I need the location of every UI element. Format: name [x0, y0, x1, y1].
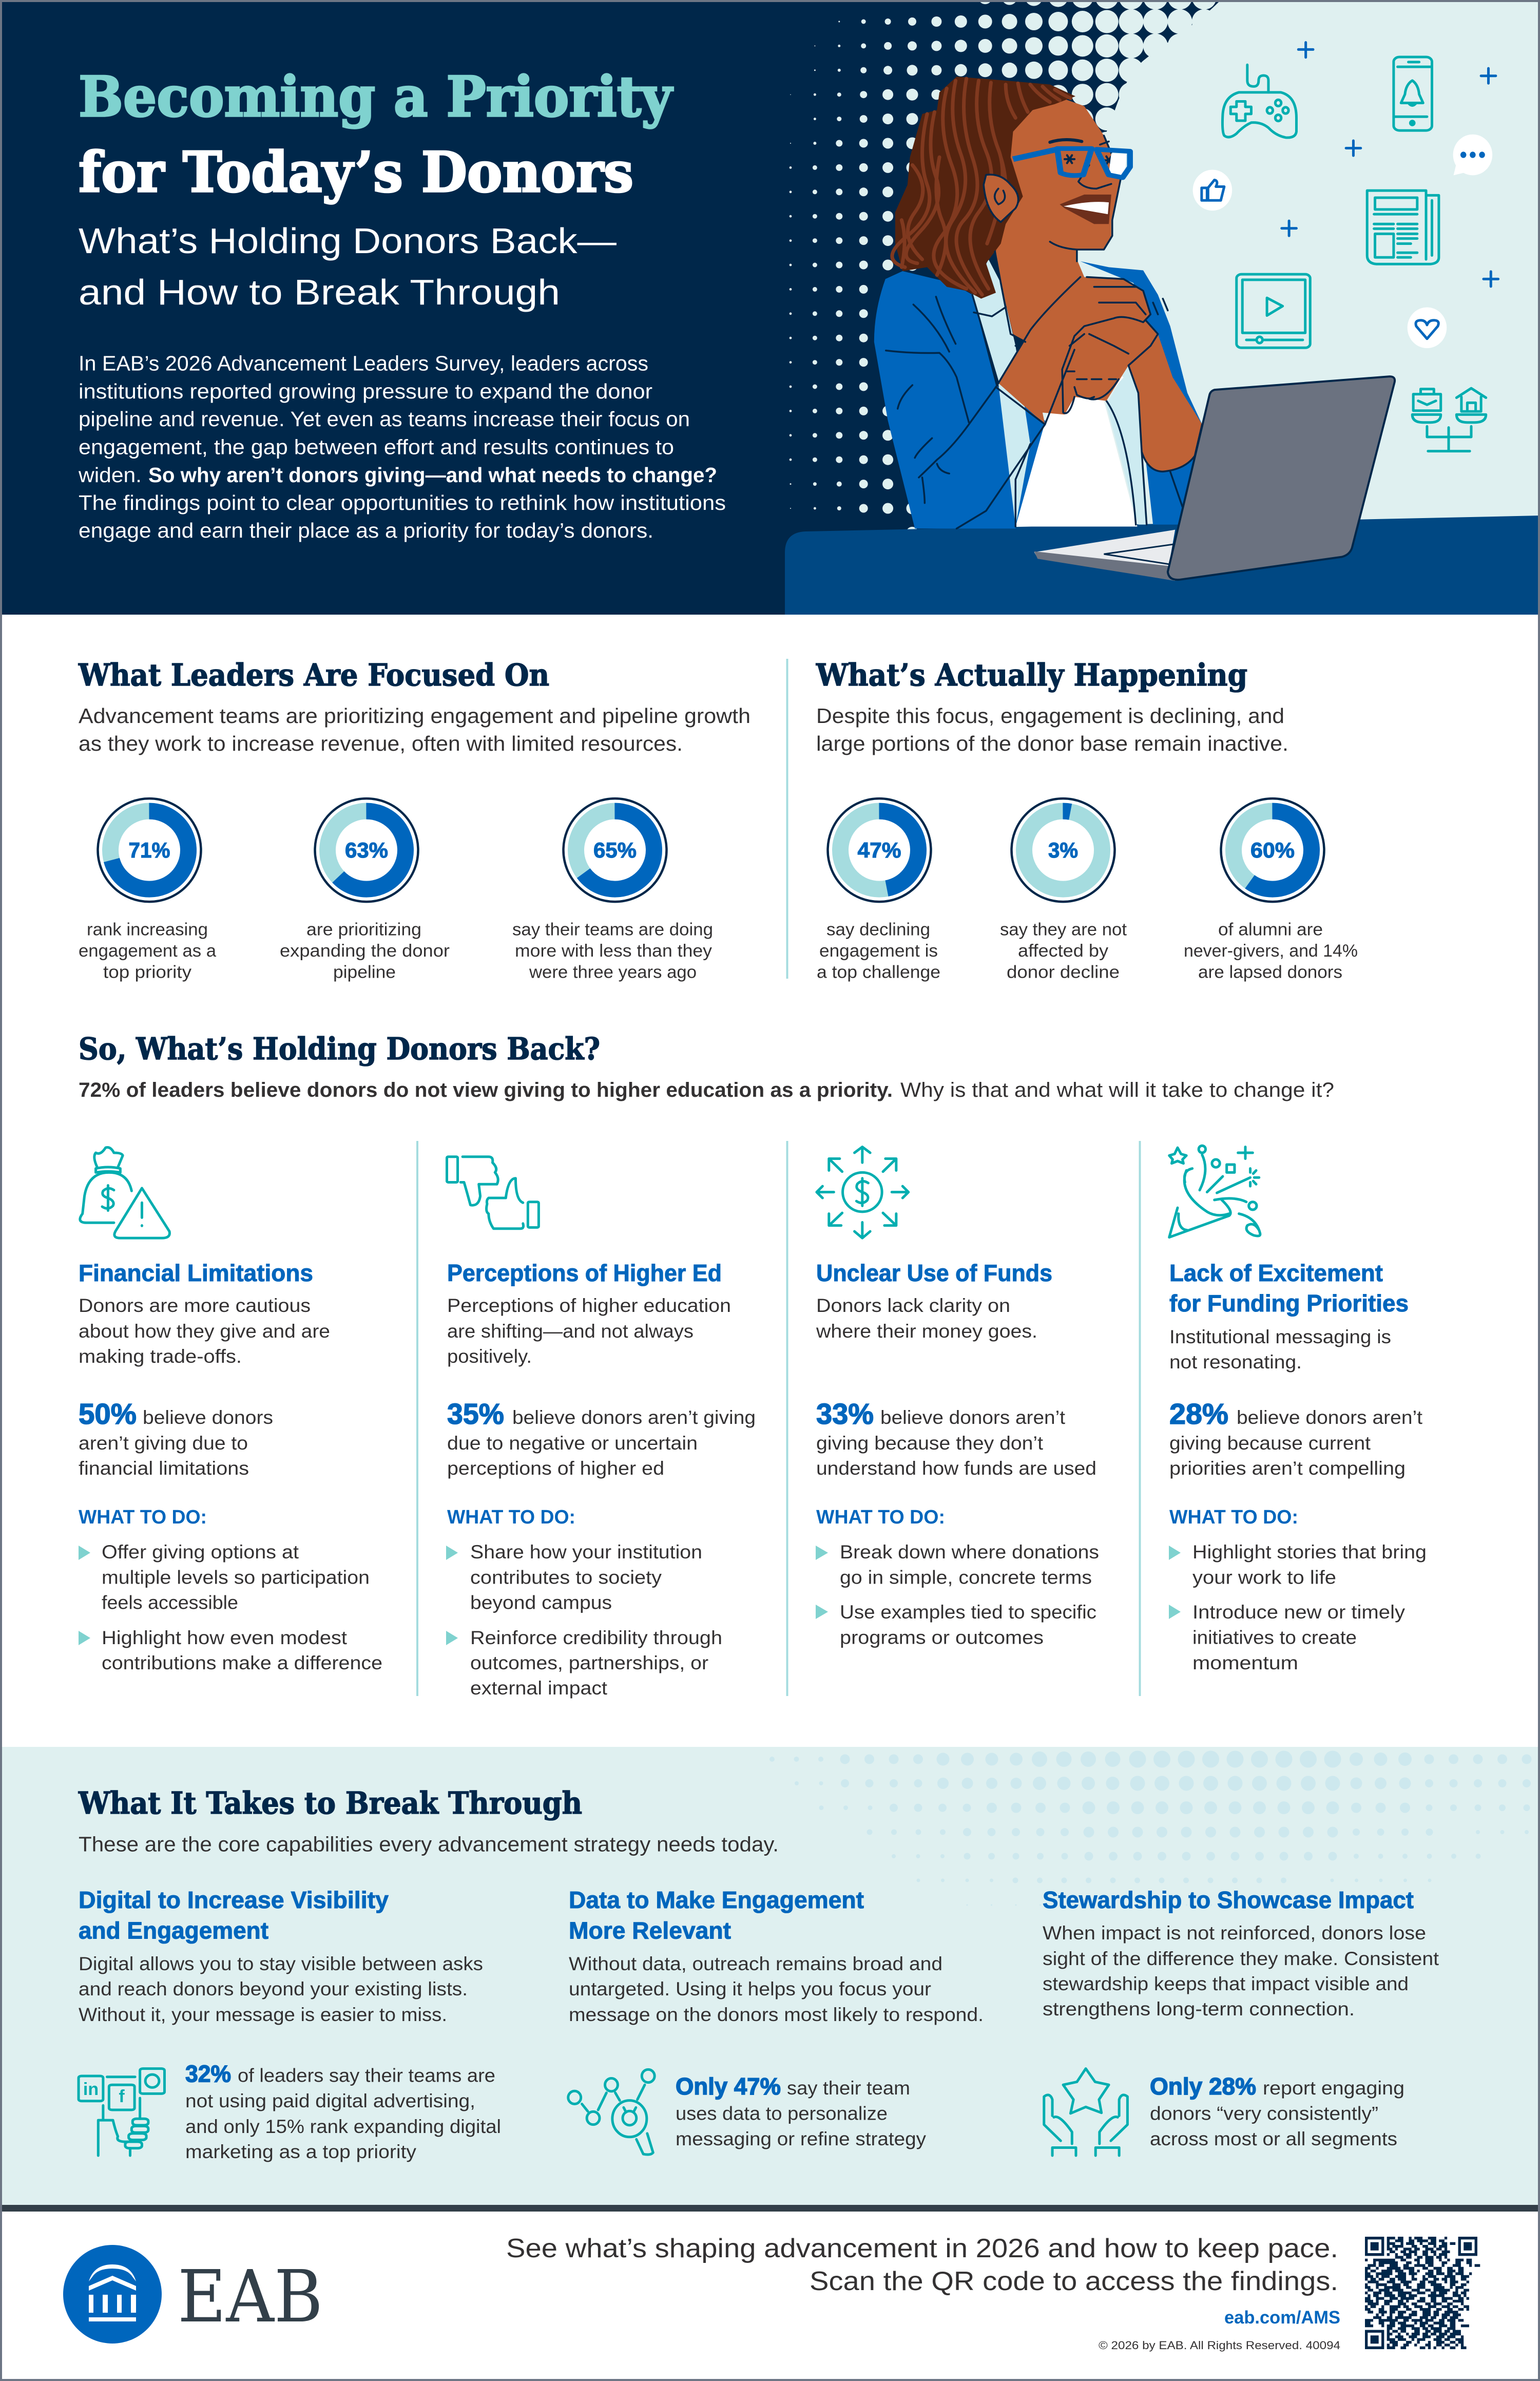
statistic — [1150, 2073, 1404, 2149]
description — [816, 1295, 1037, 1342]
statistic: priorities aren’t compelling — [1169, 1458, 1406, 1479]
heading — [79, 1887, 389, 1944]
action list — [446, 1541, 722, 1699]
description: Donors are more cautious — [79, 1295, 311, 1316]
what to do label: WHAT TO DO: — [79, 1507, 207, 1528]
icon: thumbs up badge — [1193, 170, 1232, 211]
caption: 65% — [512, 920, 713, 982]
description: where their money goes. — [816, 1321, 1037, 1342]
donut chart: 60% — [1221, 798, 1324, 902]
action list: programs or outcomes — [840, 1627, 1044, 1648]
caption: 65%: say their teams are doing — [512, 920, 713, 939]
caption: 60% — [1184, 920, 1358, 982]
donut chart: 47% — [827, 798, 931, 902]
action list: momentum — [1192, 1652, 1298, 1673]
title: for Today’s Donors — [79, 140, 633, 205]
heading: Financial Limitations — [79, 1260, 313, 1286]
link: eab.com/AMS — [1224, 2308, 1340, 2328]
description: positively. — [447, 1346, 532, 1367]
icon: video player — [1237, 274, 1310, 348]
donut chart: 63%: 63% — [345, 838, 388, 862]
call to action — [506, 2234, 1338, 2296]
action list: Offer giving options at — [102, 1541, 299, 1563]
statistic — [185, 2060, 501, 2162]
caption: 63% — [280, 920, 450, 982]
intro paragraph: pipeline and revenue. Yet even as teams increase their focus on — [79, 407, 690, 431]
intro text: large portions of the donor base remain inactive. — [816, 732, 1288, 755]
donut chart: 3%: 3% — [1048, 838, 1078, 862]
icon: thumbs down and up — [447, 1157, 538, 1229]
statistic — [79, 1398, 273, 1479]
description — [79, 1953, 483, 2025]
what to do label: WHAT TO DO: — [1169, 1507, 1298, 1528]
statistic: believe donors — [143, 1407, 273, 1428]
icon: plus signs — [1282, 43, 1498, 287]
heading: Digital to Increase Visibility — [79, 1887, 389, 1913]
lead sentence: 72% of leaders believe donors do not view giving to higher education as a priority. — [79, 1079, 893, 1101]
caption: 63%: pipeline — [333, 963, 396, 982]
description: making trade-offs. — [79, 1346, 242, 1367]
description — [569, 1953, 984, 2025]
hands — [996, 277, 1202, 471]
icon: hands holding star — [1044, 2069, 1127, 2156]
donut chart: 60%: 60% — [1250, 838, 1295, 862]
light background panel — [1001, 0, 1540, 615]
title — [79, 65, 673, 205]
donut chart: 63% — [315, 798, 418, 902]
action list — [1169, 1541, 1427, 1673]
description — [79, 1295, 330, 1367]
statistic: perceptions of higher ed — [447, 1458, 664, 1479]
heading: Stewardship to Showcase Impact — [1043, 1887, 1414, 1913]
icon: party popper — [1169, 1146, 1260, 1237]
heading: so what's holding donors back: So, What’s Holding Donors Back? — [79, 1031, 600, 1066]
icon: social media in hand: in — [83, 2080, 99, 2099]
statistic: believe donors aren’t — [880, 1407, 1066, 1428]
icon: dollar with arrows — [817, 1147, 909, 1238]
action list: Use examples tied to specific — [840, 1602, 1096, 1623]
caption: 60%: of alumni are — [1218, 920, 1323, 939]
donut chart: 71%: 71% — [128, 838, 170, 862]
footer — [63, 2234, 1480, 2352]
description: are shifting—and not always — [447, 1321, 694, 1342]
action list — [79, 1541, 382, 1673]
description: When impact is not reinforced, donors lose — [1043, 1922, 1426, 1944]
description: message on the donors most likely to respond. — [569, 2004, 984, 2025]
caption: 60%: never-givers, and 14% — [1184, 941, 1358, 961]
statistic: report engaging — [1263, 2078, 1404, 2099]
caption: 47%: a top challenge — [817, 963, 940, 982]
heading: Lack of Excitement — [1169, 1260, 1383, 1286]
caption: 63%: expanding the donor — [280, 941, 450, 961]
action list: contributes to society — [470, 1567, 662, 1588]
intro paragraph: engage and earn their place as a priority for today’s donors. — [79, 519, 653, 542]
description — [1169, 1326, 1391, 1373]
logo: EAB: EAB — [178, 2255, 323, 2339]
intro paragraph: widen. — [78, 463, 142, 487]
donut chart: 47%: 47% — [857, 838, 901, 862]
call to action: See what’s shaping advancement in 2026 and how to keep pace. — [506, 2234, 1338, 2263]
panel: lack of excitement — [1169, 1146, 1427, 1673]
icon: phone with bell — [1394, 57, 1432, 130]
heading: What Leaders Are Focused On — [78, 657, 549, 693]
panel: financial limitations — [79, 1148, 382, 1673]
face details — [984, 136, 1121, 342]
heading: More Relevant — [569, 1917, 731, 1944]
heading: What It Takes to Break Through — [78, 1785, 582, 1821]
capability: data — [568, 1887, 984, 2155]
statistic: understand how funds are used — [816, 1458, 1096, 1479]
intro paragraph: The findings point to clear opportunities to rethink how institutions — [79, 491, 726, 515]
statistic: financial limitations — [79, 1458, 249, 1479]
statistic: messaging or refine strategy — [676, 2128, 927, 2149]
action list — [816, 1541, 1099, 1648]
intro paragraph: engagement, the gap between effort and results continues to — [79, 435, 674, 459]
statistic: of leaders say their teams are — [238, 2065, 495, 2086]
action list: initiatives to create — [1192, 1627, 1357, 1648]
what to do label: WHAT TO DO: — [816, 1507, 945, 1528]
donut chart: 65% — [564, 798, 666, 902]
intro paragraph: So why aren’t donors giving—and what needs to change? — [148, 463, 717, 487]
intro text: Despite this focus, engagement is declining, and — [816, 704, 1284, 728]
action list: Highlight how even modest — [102, 1627, 348, 1648]
description: not resonating. — [1169, 1351, 1302, 1373]
action list: your work to life — [1192, 1567, 1336, 1588]
description: stewardship keeps that impact visible and — [1043, 1973, 1409, 1994]
statistic: giving because they don’t — [816, 1433, 1044, 1454]
heading: Unclear Use of Funds — [816, 1260, 1052, 1286]
statistic: 32% — [185, 2060, 231, 2087]
statistic — [676, 2073, 927, 2149]
subtitle: and How to Break Through — [79, 272, 560, 312]
heading: Perceptions of Higher Ed — [447, 1260, 722, 1286]
statistic: 28% — [1169, 1398, 1228, 1431]
icon: money bag with warning — [80, 1148, 169, 1238]
donut chart: 3% — [1011, 798, 1115, 902]
statistic: 35% — [447, 1398, 504, 1431]
icon: social media in hand: f — [119, 2087, 125, 2106]
capability: stewardship — [1043, 1887, 1439, 2156]
action list: beyond campus — [470, 1592, 612, 1613]
statistic: across most or all segments — [1150, 2128, 1397, 2149]
caption: 71%: top priority — [103, 963, 191, 982]
icon: balance scale — [1412, 388, 1486, 451]
call to action: Scan the QR code to access the findings. — [810, 2266, 1338, 2296]
icon: data nodes and magnifier — [568, 2069, 654, 2155]
donut chart: 71% — [98, 798, 201, 902]
panel: what it takes to break through — [0, 1747, 1540, 2205]
icon: newspaper — [1367, 191, 1439, 264]
action list: Highlight stories that bring — [1192, 1541, 1427, 1563]
statistic: uses data to personalize — [676, 2103, 888, 2124]
caption: 63%: are prioritizing — [306, 920, 421, 939]
laptop — [1034, 376, 1395, 581]
logo: EAB — [63, 2245, 323, 2344]
statistic: donors “very consistently” — [1150, 2103, 1378, 2124]
statistic: say their team — [787, 2078, 910, 2099]
caption: 71%: rank increasing — [87, 920, 208, 939]
lead sentence — [79, 1079, 1334, 1101]
description: Without data, outreach remains broad and — [569, 1953, 942, 1974]
copyright: © 2026 by EAB. All Rights Reserved. 40094 — [1099, 2339, 1340, 2352]
action list: outcomes, partnerships, or — [470, 1652, 708, 1673]
mouth — [1060, 195, 1111, 224]
action list: external impact — [470, 1678, 608, 1699]
caption: 47%: say declining — [826, 920, 930, 939]
description — [447, 1295, 731, 1367]
statistic — [816, 1398, 1096, 1479]
capability: digital — [79, 1887, 501, 2162]
caption: 3%: affected by — [1018, 941, 1108, 961]
what to do label: WHAT TO DO: — [447, 1507, 575, 1528]
panel: hero banner — [0, 0, 1540, 615]
intro text: These are the core capabilities every advancement strategy needs today. — [79, 1833, 779, 1856]
icon: game controller — [1222, 65, 1296, 138]
description: Digital allows you to stay visible between asks — [79, 1953, 483, 1974]
statistic: believe donors aren’t giving — [512, 1407, 756, 1428]
caption: 47%: engagement is — [819, 941, 938, 961]
halftone dots — [791, 0, 1204, 533]
desk — [785, 516, 1540, 615]
statistic: and only 15% rank expanding digital — [185, 2116, 501, 2137]
description: Perceptions of higher education — [447, 1295, 731, 1316]
statistic: not using paid digital advertising, — [185, 2090, 475, 2111]
description: sight of the difference they make. Consistent — [1043, 1948, 1439, 1969]
intro paragraph — [78, 351, 726, 542]
action list: Reinforce credibility through — [470, 1627, 722, 1648]
action list: multiple levels so participation — [102, 1567, 370, 1588]
statistic — [1169, 1398, 1423, 1479]
action list: go in simple, concrete terms — [840, 1567, 1092, 1588]
panel: what's actually happening — [816, 657, 1358, 982]
description: about how they give and are — [79, 1321, 330, 1342]
description: Without it, your message is easier to miss. — [79, 2004, 447, 2025]
heading: and Engagement — [79, 1917, 268, 1944]
description: Institutional messaging is — [1169, 1326, 1391, 1347]
donut chart: 65%: 65% — [593, 838, 637, 862]
statistic: 33% — [816, 1398, 874, 1431]
description: and reach donors beyond your existing lists. — [79, 1978, 468, 1999]
icon: social media in hand — [79, 2069, 164, 2156]
description: strengthens long-term connection. — [1043, 1998, 1355, 2020]
heading: for Funding Priorities — [1169, 1290, 1409, 1317]
caption: 3%: donor decline — [1007, 963, 1120, 982]
action list: feels accessible — [102, 1592, 238, 1613]
heading — [1169, 1260, 1409, 1317]
caption: 3% — [1000, 920, 1127, 982]
icon: heart badge — [1408, 307, 1447, 348]
statistic: giving because current — [1169, 1433, 1371, 1454]
caption: 3%: say they are not — [1000, 920, 1127, 939]
panel: unclear use of funds — [816, 1147, 1099, 1648]
description: Donors lack clarity on — [816, 1295, 1010, 1316]
intro paragraph: In EAB’s 2026 Advancement Leaders Survey, leaders across — [79, 351, 648, 375]
caption: 65%: were three years ago — [529, 963, 697, 982]
panel: what leaders are focused on — [78, 657, 750, 982]
caption: 65%: more with less than they — [515, 941, 712, 961]
skin: face neck and arms — [996, 99, 1202, 471]
intro text — [79, 704, 750, 755]
heading: What’s Actually Happening — [816, 657, 1247, 693]
description: untargeted. Using it helps you focus your — [569, 1978, 931, 1999]
statistic: Only 47% — [676, 2073, 781, 2100]
lead sentence: Why is that and what will it take to change it? — [900, 1079, 1334, 1101]
caption: 60%: are lapsed donors — [1198, 963, 1342, 982]
subtitle — [79, 221, 617, 312]
statistic: 50% — [79, 1398, 137, 1431]
intro text — [816, 704, 1288, 755]
hair — [892, 77, 1075, 299]
heading — [569, 1887, 864, 1944]
action list: Introduce new or timely — [1192, 1602, 1406, 1623]
statistic — [447, 1398, 756, 1479]
description — [1043, 1922, 1439, 2020]
subtitle: What’s Holding Donors Back— — [79, 221, 617, 261]
statistic: Only 28% — [1150, 2073, 1256, 2100]
heading: Data to Make Engagement — [569, 1887, 864, 1913]
jacket — [874, 259, 1202, 528]
statistic: believe donors aren’t — [1237, 1407, 1423, 1428]
caption: 71%: engagement as a — [79, 941, 216, 961]
action list: Share how your institution — [470, 1541, 702, 1563]
icon: chat bubble — [1453, 135, 1492, 175]
panel: perceptions of higher ed — [446, 1157, 756, 1699]
statistic: marketing as a top priority — [185, 2141, 417, 2162]
action list: contributions make a difference — [102, 1652, 382, 1673]
illustration: woman at laptop — [874, 77, 1395, 581]
intro paragraph: institutions reported growing pressure to expand the donor — [79, 379, 652, 403]
QR code — [1365, 2237, 1480, 2349]
intro text: Advancement teams are prioritizing engagement and pipeline growth — [79, 704, 750, 728]
caption: 47% — [817, 920, 940, 982]
caption: 71% — [79, 920, 216, 982]
action list: Break down where donations — [840, 1541, 1099, 1563]
icons floating around the illustration — [1193, 43, 1498, 451]
title: Becoming a Priority — [79, 65, 673, 129]
statistic: aren’t giving due to — [79, 1433, 248, 1454]
statistic: due to negative or uncertain — [447, 1433, 698, 1454]
glasses — [1013, 148, 1130, 178]
intro text: as they work to increase revenue, often with limited resources. — [79, 732, 683, 755]
